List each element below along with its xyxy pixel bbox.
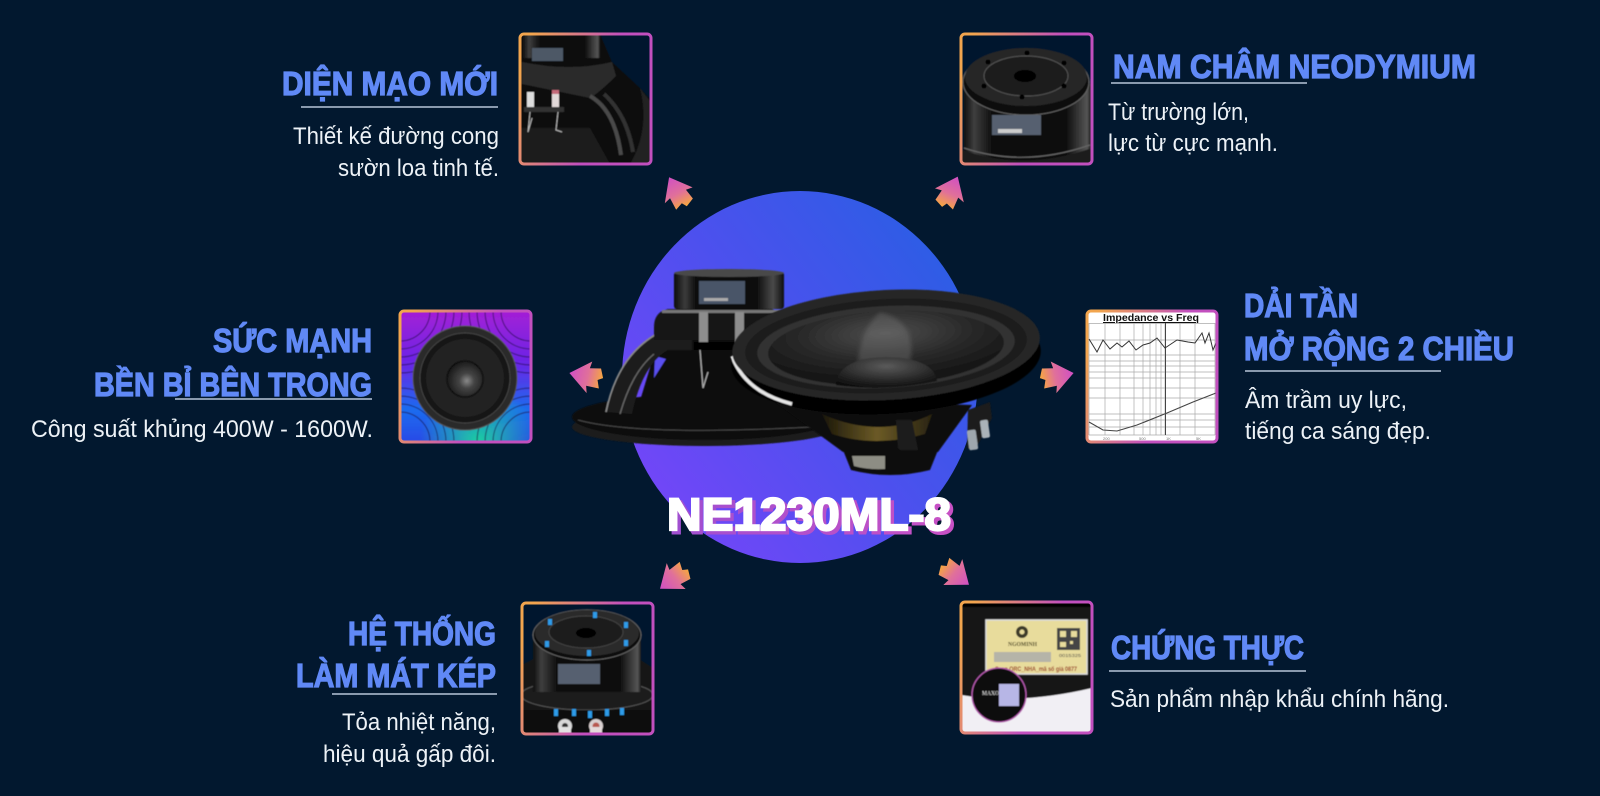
- panel: chứng thực: [961, 602, 1449, 733]
- model name: NE1230ML-8: [670, 492, 954, 543]
- arrow: left: [566, 357, 606, 396]
- description: tiếng ca sáng đẹp.: [1245, 418, 1431, 445]
- image: authenticity certificate: [961, 602, 1092, 733]
- panel: sức mạnh: [32, 310, 532, 444]
- image: impedance chart: 200: [1103, 436, 1110, 441]
- description: Công suất khủng 400W - 1600W.: [31, 416, 373, 443]
- description: [293, 123, 499, 182]
- description: Âm trầm uy lực,: [1245, 387, 1407, 414]
- panel: nam châm neodymium: [961, 34, 1476, 164]
- heading: MỞ RỘNG 2 CHIỀU: [1244, 329, 1514, 367]
- heading: [1244, 287, 1514, 367]
- heading: [94, 322, 372, 403]
- description: [1108, 99, 1278, 157]
- arrow: bottom left: [650, 555, 697, 601]
- image: authenticity certificate: 0015325: [1059, 653, 1082, 658]
- arrow: bottom right: [932, 551, 979, 597]
- description: lực từ cực mạnh.: [1108, 130, 1278, 157]
- panel: diện mạo mới: [282, 34, 651, 182]
- description: Từ trường lớn,: [1108, 99, 1249, 126]
- model name: NE1230ML-8: [667, 489, 951, 540]
- heading: HỆ THỐNG: [348, 614, 496, 652]
- image: impedance chart: 500: [1139, 436, 1146, 441]
- arrow: top right: [929, 170, 972, 214]
- heading: [296, 614, 496, 694]
- central gradient circle: [622, 191, 978, 563]
- description: hiệu quả gấp đôi.: [323, 741, 496, 768]
- image: impedance chart: Impedance vs Freq: [1103, 313, 1199, 324]
- heading: CHỨNG THỰC: [1111, 629, 1304, 666]
- panel: dải tần: [1087, 287, 1514, 445]
- heading: BỀN BỈ BÊN TRONG: [94, 366, 372, 403]
- heading: DẢI TẦN: [1244, 287, 1358, 324]
- image: impedance chart: 5K: [1196, 436, 1201, 441]
- panel: hệ thống làm mát kép: [296, 603, 653, 768]
- image: impedance chart: 1K: [1166, 436, 1171, 441]
- image: speaker side detail: [520, 34, 651, 164]
- image: authenticity certificate: NGOMINH: [1008, 642, 1037, 648]
- description: [1245, 387, 1431, 445]
- description: sườn loa tinh tế.: [338, 155, 499, 182]
- heading: DIỆN MẠO MỚI: [282, 65, 498, 102]
- image: authenticity certificate: MAXO: [982, 691, 1000, 697]
- heading: LÀM MÁT KÉP: [296, 657, 496, 694]
- arrow: top left: [655, 170, 699, 215]
- image: impedance chart: [1087, 311, 1217, 442]
- description: [323, 709, 496, 768]
- image: dual cooling magnet: [521, 603, 653, 735]
- image: speaker on neon background: [398, 310, 532, 444]
- heading: SỨC MẠNH: [213, 322, 372, 359]
- heading: NAM CHÂM NEODYMIUM: [1113, 48, 1476, 85]
- speaker: front view: [728, 282, 1044, 475]
- image: authenticity certificate: Scan QRC_NHA_mã số giả 0877: [995, 666, 1078, 673]
- speaker: rear view: [572, 269, 838, 446]
- arrow: right: [1037, 357, 1077, 396]
- description: Tỏa nhiệt năng,: [342, 709, 496, 736]
- image: neodymium magnet: [961, 34, 1092, 164]
- description: Sản phẩm nhập khẩu chính hãng.: [1110, 686, 1449, 713]
- description: Thiết kế đường cong: [293, 123, 499, 150]
